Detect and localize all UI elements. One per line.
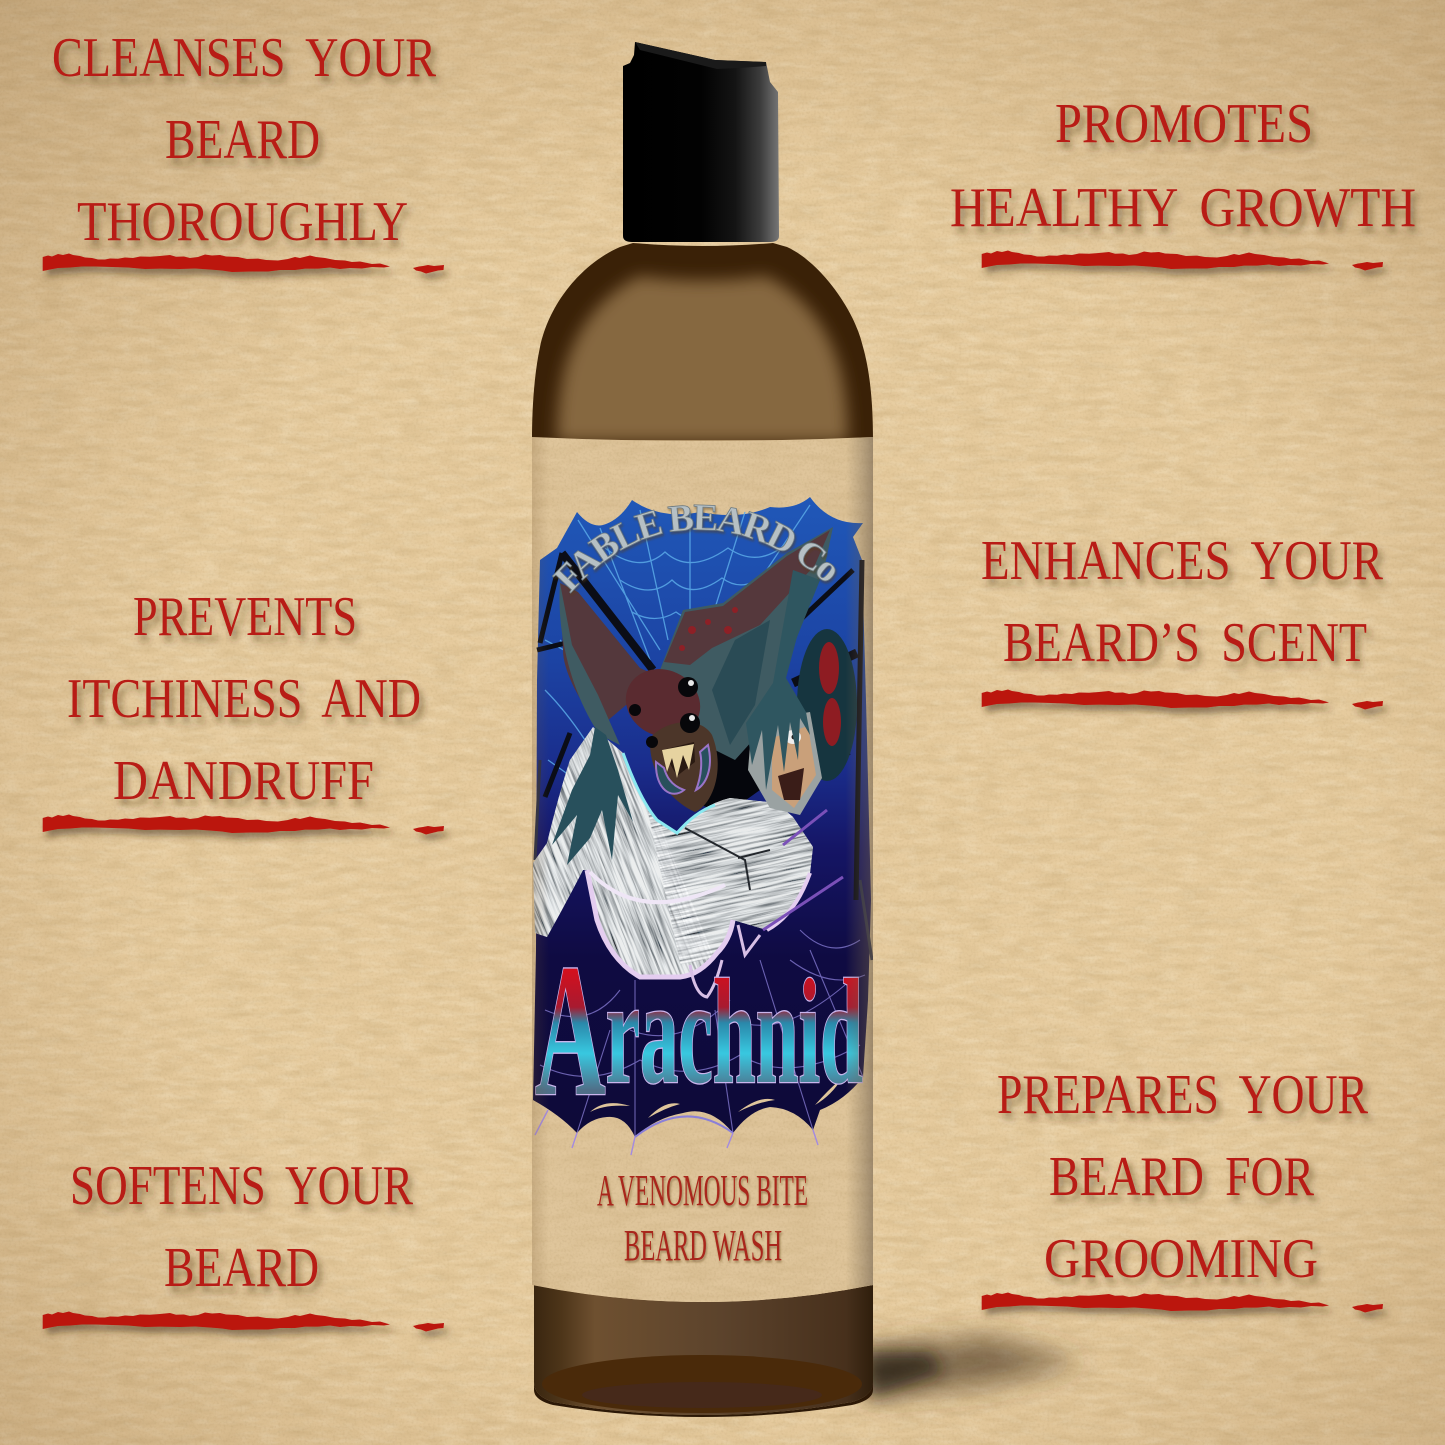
callout: promotes healthy growth: PROMOTES	[1055, 93, 1313, 155]
callout: enhances your beard's scent	[981, 530, 1384, 710]
callout: cleanses your beard thoroughly: BEARD	[165, 109, 320, 171]
bottle label	[532, 437, 873, 1302]
product description: A VENOMOUS BITE	[597, 1166, 808, 1215]
abdomen	[797, 629, 857, 781]
bottle cap	[623, 42, 779, 242]
black back legs	[537, 553, 862, 900]
product name: Arachnid: A	[535, 926, 606, 1136]
callout: prevents itchiness and dandruff: ITCHINESS AND	[67, 668, 421, 730]
callout: cleanses your beard thoroughly: CLEANSES YOUR	[52, 27, 437, 89]
web strands	[763, 810, 843, 930]
victim's face	[748, 712, 822, 815]
bottle base	[534, 1285, 873, 1417]
callout: enhances your beard's scent: BEARD’S SCENT	[1003, 612, 1367, 674]
shoulder highlight	[557, 276, 848, 442]
left claw hand	[552, 727, 633, 865]
callout: softens your beard	[43, 1155, 444, 1332]
callout: promotes healthy growth	[950, 93, 1416, 270]
right arm and clawed hand	[746, 570, 820, 790]
callout: cleanses your beard thoroughly	[43, 27, 444, 274]
spider head	[626, 669, 700, 734]
bottle ground shadow	[860, 1336, 1085, 1398]
body	[660, 527, 833, 760]
callout: prevents itchiness and dandruff: PREVENTS	[133, 586, 357, 648]
product name: Arachnid: rachnid	[606, 949, 863, 1115]
product description	[597, 1166, 808, 1270]
callout: prevents itchiness and dandruff: DANDRUFF	[113, 750, 374, 812]
callout: prevents itchiness and dandruff	[43, 586, 444, 834]
label artwork: webbed victim	[533, 570, 844, 999]
callout: prepares your beard for grooming: BEARD FOR	[1049, 1146, 1315, 1208]
callout: prepares your beard for grooming: PREPARES YOUR	[997, 1064, 1369, 1126]
left leg	[560, 583, 647, 720]
label artwork: spider	[537, 527, 862, 900]
label artwork: spider web backdrop	[533, 497, 872, 1155]
callout: prepares your beard for grooming	[982, 1064, 1383, 1312]
callout: softens your beard: BEARD	[164, 1237, 319, 1299]
product bottle	[532, 42, 873, 1417]
bottle shoulder	[532, 243, 873, 440]
product description: BEARD WASH	[624, 1221, 782, 1270]
shadow behind head	[704, 744, 760, 807]
callout: prepares your beard for grooming: GROOMING	[1044, 1228, 1318, 1290]
callout: cleanses your beard thoroughly: THOROUGHLY	[77, 191, 408, 253]
callout: softens your beard: SOFTENS YOUR	[70, 1155, 414, 1217]
brand name: Fable Beard Co: FABLE BEARD Co	[552, 504, 838, 596]
